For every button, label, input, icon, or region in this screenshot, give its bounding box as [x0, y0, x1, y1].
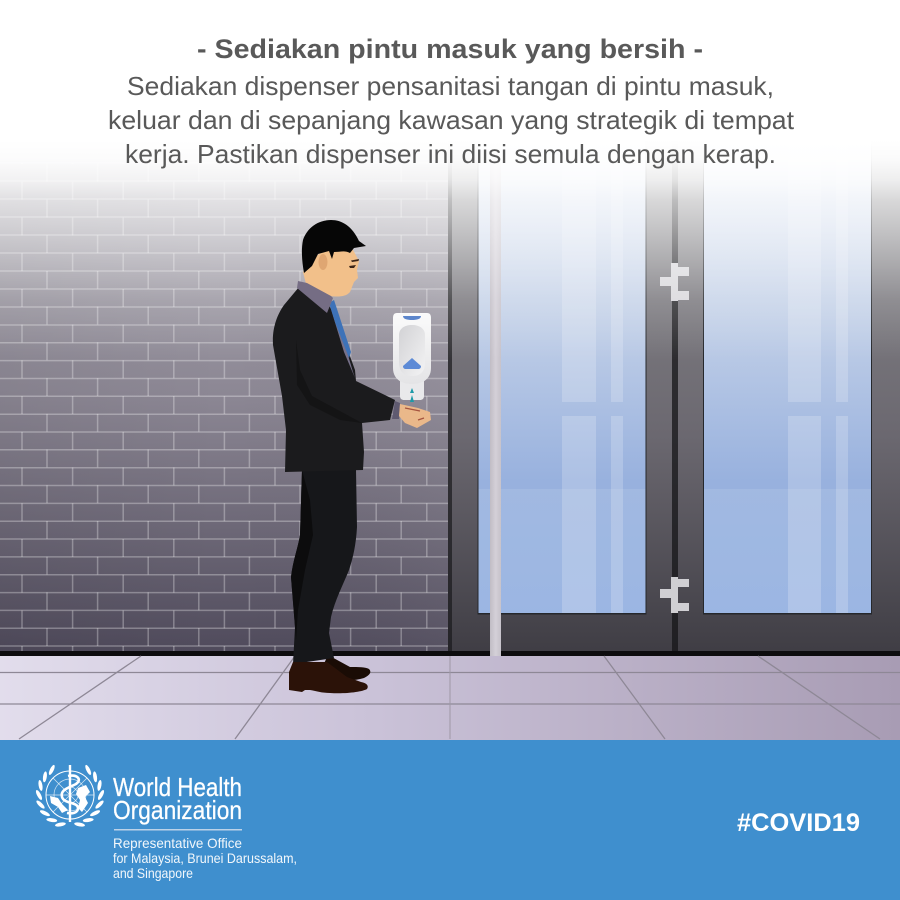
WHO emblem	[35, 764, 105, 827]
ear	[318, 254, 328, 270]
baseboard	[0, 651, 900, 656]
WHO logo	[35, 764, 297, 881]
door gap	[672, 0, 678, 652]
upper hinge	[660, 263, 689, 301]
dispenser window	[399, 325, 425, 376]
serpent	[62, 776, 79, 813]
staff	[69, 765, 71, 822]
organization name	[113, 772, 242, 825]
right door window	[703, 100, 872, 614]
office lines	[113, 835, 297, 881]
body text	[108, 71, 795, 169]
tie	[329, 300, 351, 358]
pole	[490, 0, 501, 657]
back shoe	[322, 655, 370, 680]
body text: keluar dan di sepanjang kawasan yang strategik di tempat	[108, 105, 795, 135]
hashtag: #COVID19	[737, 809, 860, 837]
rear trouser leg shade	[291, 470, 313, 640]
hand sanitizer dispenser	[393, 313, 431, 402]
laurel leaves	[35, 764, 105, 827]
lower hinge	[660, 577, 689, 613]
left door window	[478, 100, 646, 614]
collar	[297, 281, 333, 313]
dispenser body	[393, 313, 431, 384]
body text: kerja. Pastikan dispenser ini diisi semula dengan kerap.	[125, 139, 776, 169]
title: - Sediakan pintu masuk yang bersih -	[197, 34, 703, 64]
finger detail	[405, 408, 424, 420]
footer band	[0, 740, 900, 900]
cuff	[392, 401, 400, 419]
continents	[50, 785, 90, 813]
nozzle housing	[400, 380, 424, 400]
neck and face	[303, 247, 359, 297]
body text: Sediakan dispenser pensanitasi tangan di pintu masuk,	[127, 71, 774, 101]
hands	[399, 404, 431, 428]
white fade over top of scene	[0, 0, 900, 360]
man washing hands	[273, 220, 431, 693]
top blue button	[403, 316, 421, 320]
glass doors	[448, 0, 900, 652]
logo rule	[114, 829, 242, 830]
hair	[302, 220, 366, 273]
organization name: Organization	[113, 795, 242, 825]
trousers	[291, 470, 357, 664]
brick wall	[0, 0, 449, 652]
blue droplet mark	[403, 358, 421, 369]
shirt	[330, 306, 355, 378]
organization name: World Health	[113, 772, 242, 802]
jacket arm shade	[296, 340, 362, 423]
jacket	[273, 287, 395, 472]
front shoe	[289, 662, 368, 693]
eyebrow	[351, 259, 359, 262]
office lines: and Singapore	[113, 865, 193, 881]
sanitizer drops	[410, 388, 414, 402]
eye	[349, 265, 356, 268]
office lines: for Malaysia, Brunei Darussalam,	[113, 850, 297, 866]
office lines: Representative Office	[113, 835, 242, 851]
floor	[0, 656, 900, 740]
